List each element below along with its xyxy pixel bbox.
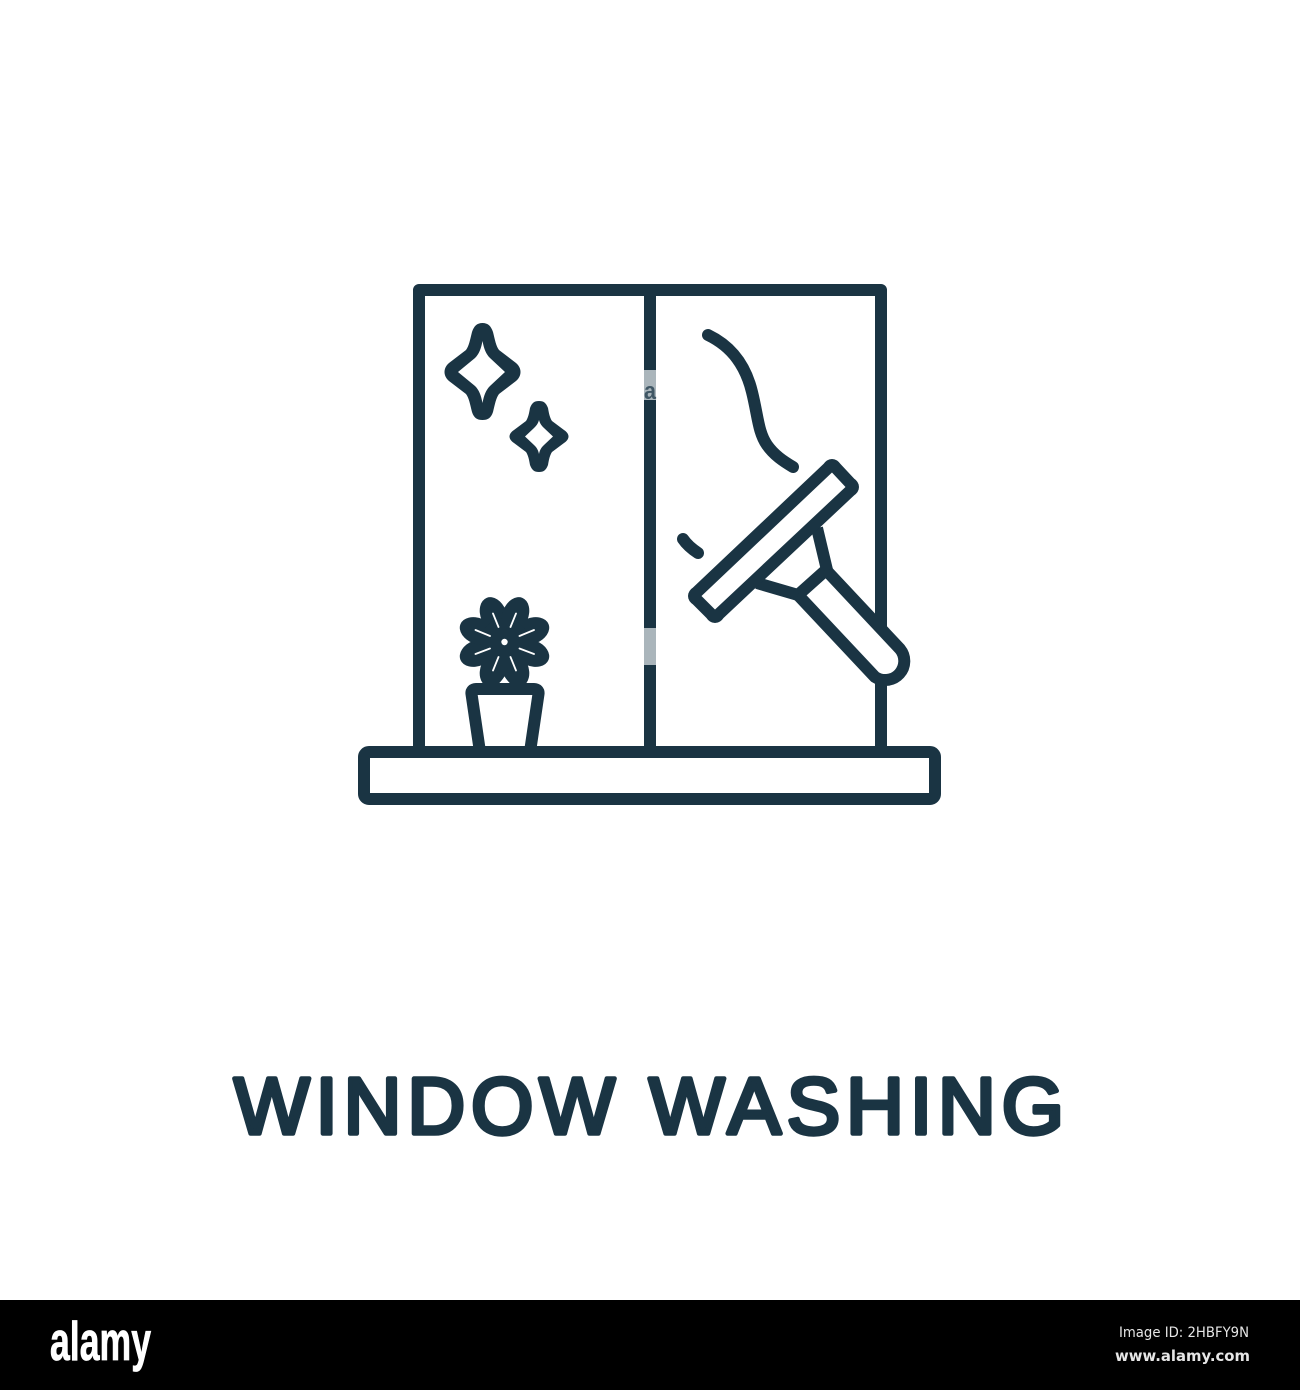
small sparkle (510, 401, 568, 472)
window frame (419, 290, 881, 752)
squeegee blade (694, 465, 853, 617)
flower plant (456, 593, 553, 691)
footer bar (0, 1300, 1300, 1390)
squeegee handle (798, 570, 904, 680)
petal highlights (476, 614, 534, 683)
flower pot (471, 689, 539, 752)
large sparkle (444, 323, 520, 420)
footer logo: alamy (50, 1310, 151, 1372)
window sill (364, 752, 935, 799)
flower petals (456, 593, 553, 691)
water streak (708, 335, 793, 467)
window mullion (644, 290, 656, 752)
watermark fragments on mullion (644, 370, 657, 665)
image id: Image ID: 2HBFY9N (1119, 1325, 1249, 1341)
small water streak (683, 539, 698, 553)
squeegee neck (757, 528, 827, 595)
website url: www.alamy.com (1115, 1347, 1250, 1365)
icon: window washing (364, 290, 935, 799)
watermark fragments on mullion: a (644, 378, 657, 405)
title: WINDOW WASHING (234, 1062, 1064, 1150)
